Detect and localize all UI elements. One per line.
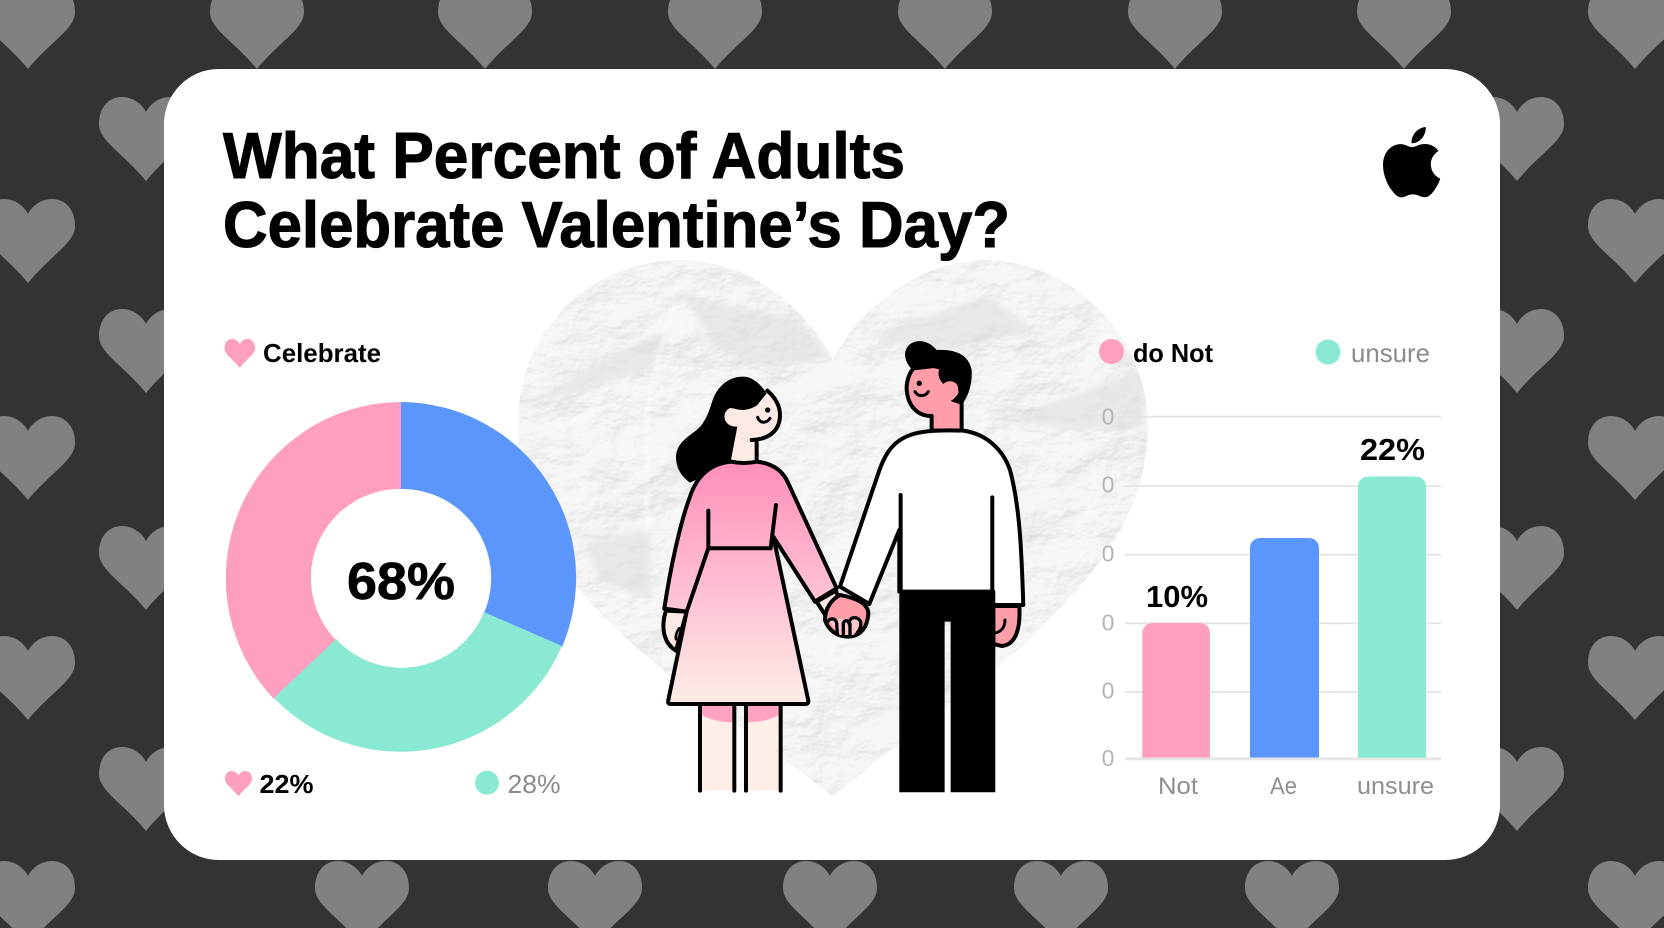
man sweater [840, 430, 1023, 605]
man right hand [993, 606, 1020, 646]
donut segment: teal [274, 612, 562, 752]
donut segment: pink [226, 402, 401, 699]
y axis labels: 0 [1102, 610, 1114, 636]
legend: celebrate: Celebrate [263, 338, 381, 368]
x axis labels [1158, 773, 1434, 800]
x axis labels: Not [1158, 773, 1198, 800]
man [840, 341, 1023, 792]
woman left hand [663, 611, 687, 651]
donut segment: blue [401, 402, 576, 647]
legend: unsure [1316, 338, 1430, 368]
y axis labels: 0 [1102, 678, 1114, 704]
crumpled paper heart [510, 250, 1160, 810]
y axis labels: 0 [1102, 745, 1114, 771]
man neck and face [907, 363, 962, 431]
white card panel [164, 69, 1500, 860]
bar value: 10%: 10% [1146, 579, 1208, 614]
title [223, 119, 1010, 261]
legend: unsure: unsure [1351, 338, 1430, 368]
title: Celebrate Valentine’s Day? [223, 188, 1010, 261]
donut chart [226, 402, 576, 752]
donut center value: 68% [347, 553, 455, 611]
legend: donut 28%: 28% [508, 769, 560, 799]
woman hair [676, 377, 767, 483]
woman dress [664, 462, 837, 704]
bar value: 22%: 22% [1360, 432, 1425, 467]
legend: do not: do Not [1133, 338, 1213, 368]
legend: do not [1099, 338, 1213, 368]
x axis labels: Ae [1270, 773, 1297, 800]
woman legs [700, 703, 734, 791]
x axis labels: unsure [1357, 773, 1434, 800]
y axis labels [1102, 404, 1114, 771]
woman wrist [817, 591, 843, 620]
legend: donut 22%: 22% [260, 769, 314, 799]
woman [663, 377, 843, 791]
bar: blue [1250, 538, 1319, 758]
joined hands [825, 595, 868, 637]
title: What Percent of Adults [223, 119, 905, 192]
y axis labels: 0 [1102, 404, 1114, 430]
y axis labels: 0 [1102, 472, 1114, 498]
woman face and neck [724, 392, 781, 462]
bar chart [1102, 404, 1441, 800]
man pants [899, 590, 995, 792]
legend: donut 28% [475, 769, 560, 799]
man hair [905, 341, 972, 405]
legend: donut 22% [225, 769, 314, 799]
couple illustration [663, 341, 1023, 792]
bar: not [1142, 623, 1210, 758]
chart gridlines [1125, 417, 1441, 759]
y axis labels: 0 [1102, 540, 1114, 566]
icon: apple logo [1383, 127, 1440, 197]
bar: unsure [1358, 476, 1426, 758]
